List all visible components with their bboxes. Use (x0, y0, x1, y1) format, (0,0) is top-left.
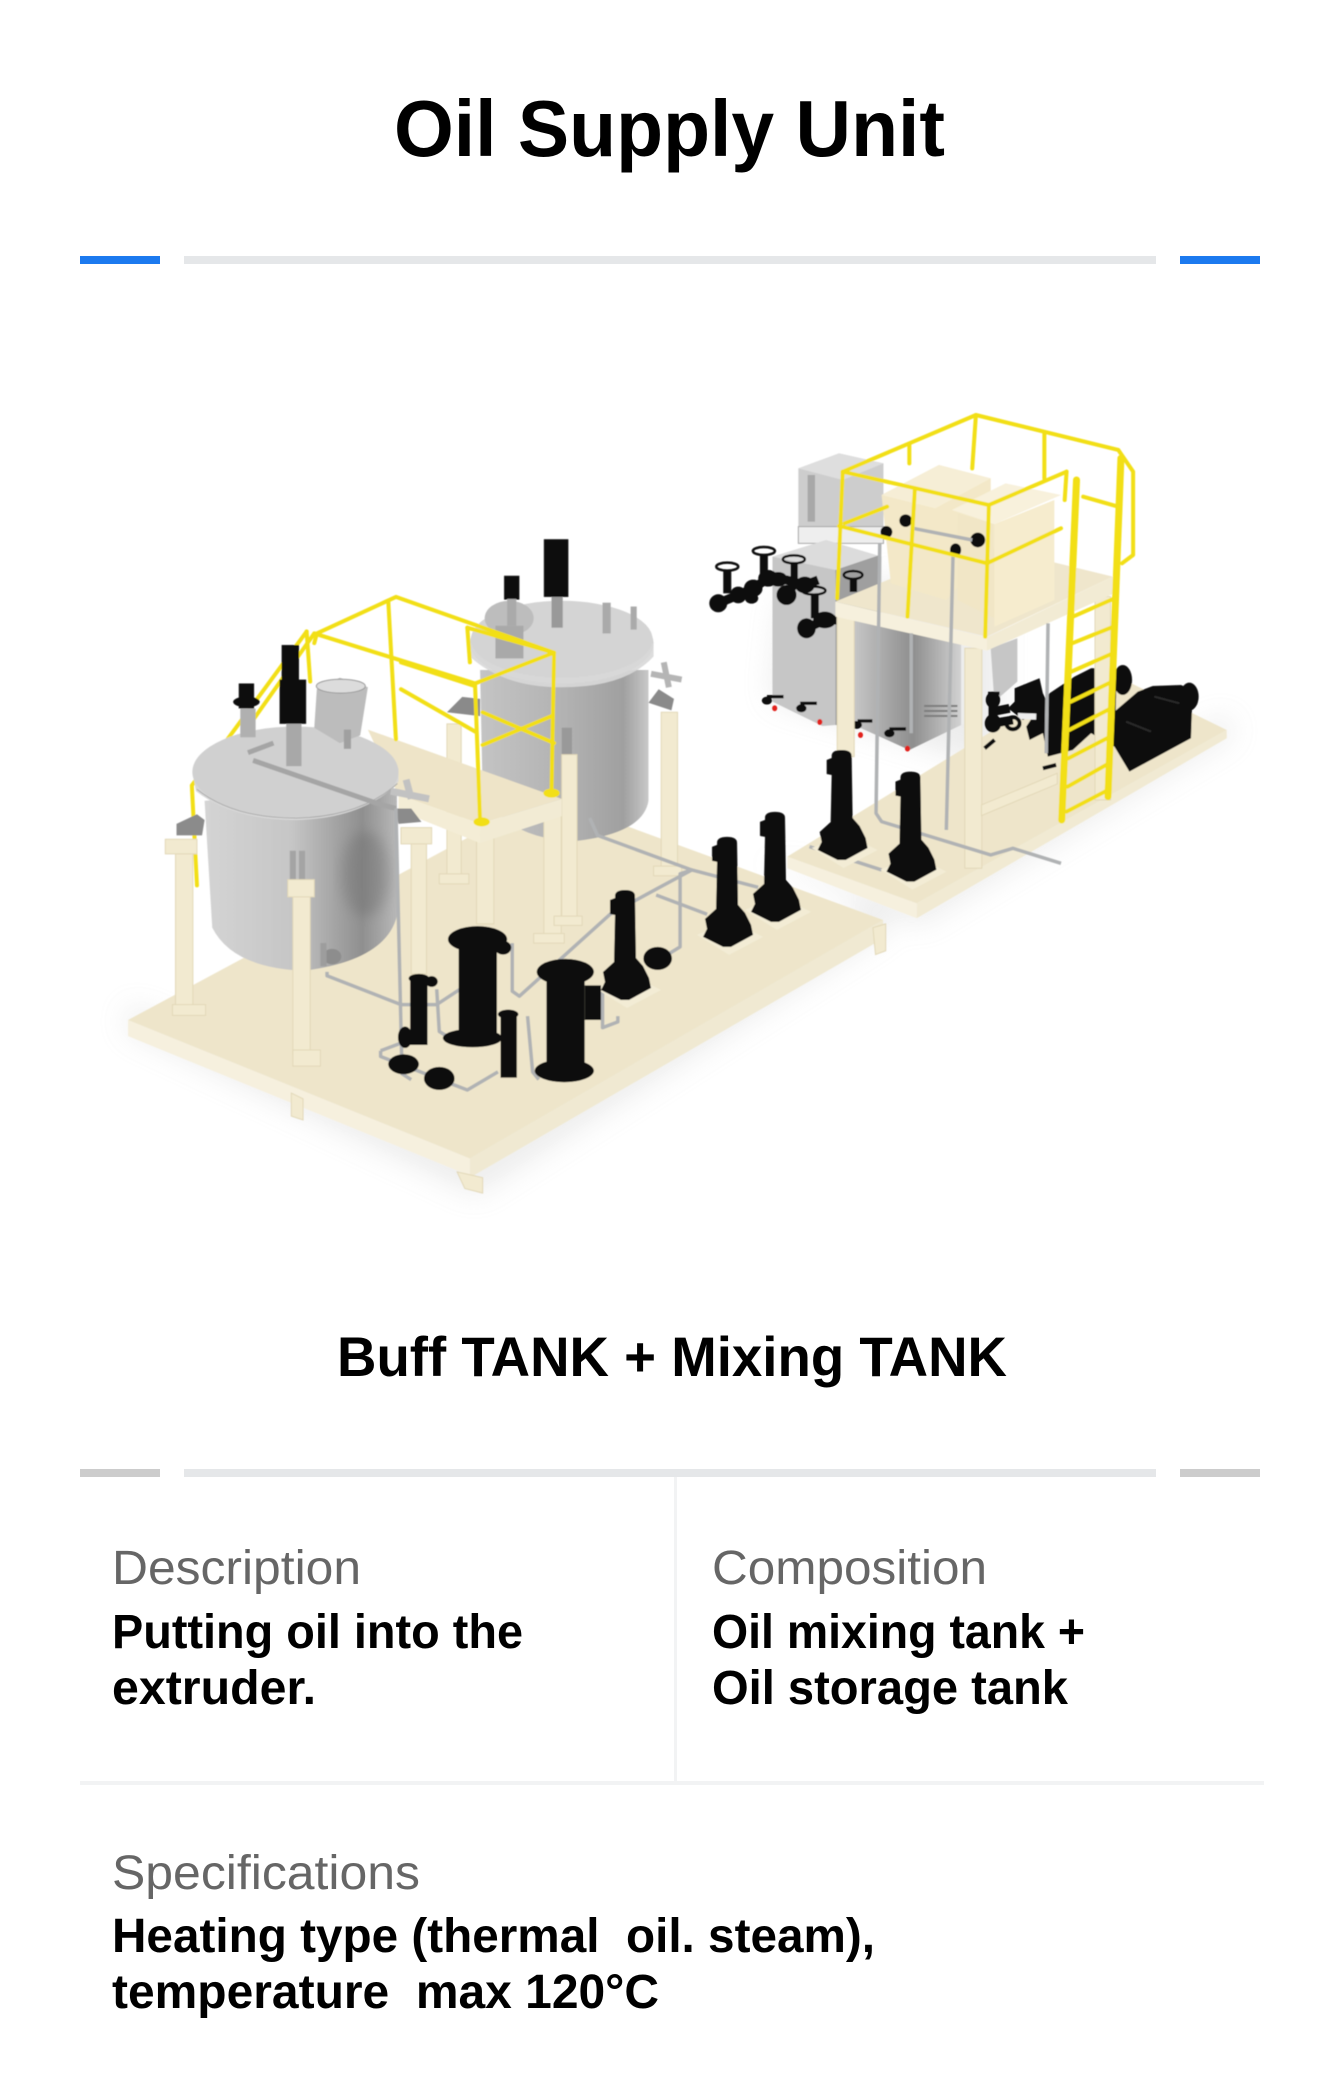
walkway deck (368, 730, 562, 843)
yellow ladder (1062, 458, 1121, 820)
cell: composition: Composition (712, 1542, 987, 1595)
cell: composition (712, 1542, 1085, 1715)
black filter vessels (388, 926, 672, 1090)
front tank (192, 727, 429, 971)
table grid lines (80, 1477, 1264, 1785)
spec table divider (80, 1469, 1260, 1477)
cell: composition: Oil mixing tank + (712, 1606, 1085, 1659)
upper deck (835, 543, 1113, 651)
cell: description: extruder. (112, 1662, 316, 1715)
cream tanks on deck (880, 465, 1061, 627)
cell: specifications (112, 1847, 875, 2019)
cell: composition: Oil storage tank (712, 1662, 1068, 1715)
rear tank supports (439, 689, 682, 884)
cream support columns (837, 597, 1111, 868)
right module: heater cabinets, deck, pumps (709, 415, 1227, 918)
left platform (128, 796, 886, 1193)
right platform (787, 667, 1227, 918)
grey process pipes (327, 808, 758, 1090)
cell: specifications: Heating type (thermal oil. steam), (112, 1910, 875, 1963)
silver heater cabinets (762, 453, 1017, 752)
subtitle: Buff TANK + Mixing TANK (337, 1325, 1007, 1388)
rear tank (470, 539, 682, 841)
yellow rail feet (473, 788, 560, 827)
grey process pipes (809, 528, 1061, 870)
front tank rear supports (165, 808, 432, 1015)
top divider (80, 256, 1260, 264)
front column (288, 851, 320, 1066)
illustration: oil supply unit equipment (125, 415, 1235, 1195)
vertical pumps (595, 812, 811, 1008)
left module: tanks, deck, pumps (128, 539, 886, 1193)
front tank top fittings (233, 645, 368, 766)
cell: description: Description (112, 1542, 361, 1595)
yellow safety railing (837, 415, 1133, 637)
black valve bank (709, 547, 862, 638)
cell: specifications: Specifications (112, 1847, 420, 1900)
title: Oil Supply Unit (394, 84, 945, 173)
vertical pumps (812, 750, 946, 890)
ground shadow (125, 560, 1235, 1195)
yellow stair and walkway railing (192, 597, 554, 885)
black motor units (985, 665, 1199, 772)
deck front supports (477, 755, 582, 943)
cell: description: Putting oil into the (112, 1606, 523, 1659)
cell: description (112, 1542, 523, 1715)
cell: specifications: temperature max 120°C (112, 1966, 659, 2019)
